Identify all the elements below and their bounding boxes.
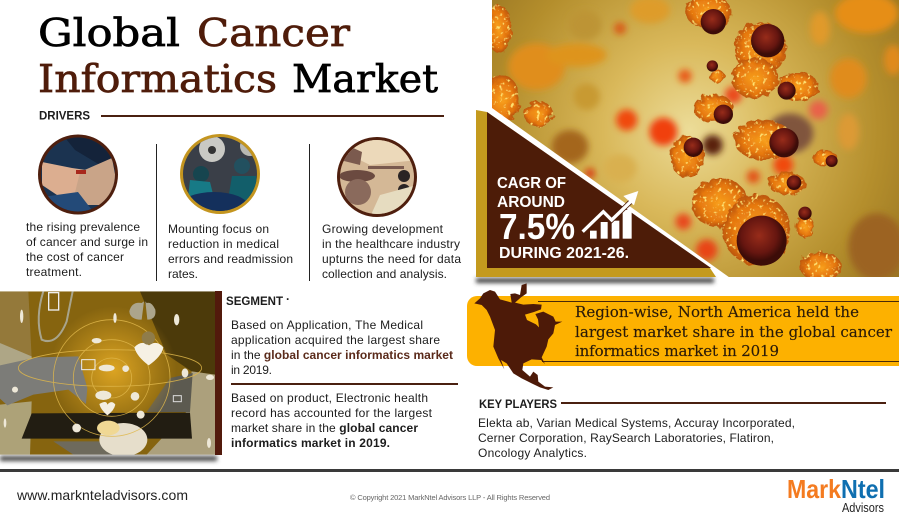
CAGR text: CAGR OF — [497, 175, 566, 192]
icon: operating room photo — [180, 134, 260, 220]
icon: surgery photo — [38, 134, 118, 214]
segment: product text: record has accounted for the largest — [231, 406, 433, 420]
key players heading: KEY PLAYERS — [479, 397, 557, 411]
banner text: largest market share in the global cancer — [575, 323, 893, 341]
footer copyright: © Copyright 2021 MarkNtel Advisors LLP - All Rights Reserved — [350, 493, 550, 502]
banner text: Region-wise, North America held the — [575, 303, 859, 321]
segment: application text — [231, 318, 453, 377]
driver 3: healthcare industry — [322, 137, 461, 281]
logo: Mark — [787, 474, 841, 504]
driver 1 text: treatment. — [26, 265, 82, 279]
driver 2 text — [168, 222, 293, 281]
icon: North America map — [474, 283, 562, 390]
logo: Advisors — [842, 501, 884, 515]
title: Market — [292, 57, 438, 101]
driver 2 text: reduction in medical — [168, 237, 279, 251]
drivers heading: DRIVERS — [39, 108, 90, 122]
segment: application text: in the global cancer informatics market — [231, 348, 453, 362]
CAGR text: AROUND — [497, 194, 565, 211]
key players list: Oncology Analytics. — [478, 446, 587, 460]
segment photo — [0, 291, 222, 461]
driver 3 text: Growing development — [322, 222, 444, 236]
driver 1 text — [26, 220, 148, 279]
segment: application text: in 2019. — [231, 363, 272, 377]
title: Global — [38, 11, 180, 55]
title: Cancer — [197, 11, 351, 55]
segment: application text: application acquired the largest share — [231, 333, 440, 347]
driver 1 text: the rising prevalence — [26, 220, 140, 234]
segment heading: SEGMENT — [226, 294, 284, 308]
CAGR text: DURING 2021-26. — [499, 245, 629, 262]
banner text — [575, 303, 893, 360]
driver 1: rising prevalence — [26, 134, 148, 279]
segment: product text: market share in the global cancer — [231, 421, 418, 435]
segment heading: · — [286, 292, 290, 306]
title — [38, 11, 438, 101]
CAGR callout — [470, 100, 740, 285]
logo — [787, 474, 885, 515]
icon: stethoscope photo — [337, 137, 417, 217]
segment: product text: Based on product, Electronic health — [231, 391, 428, 405]
key players list: Elekta ab, Varian Medical Systems, Accuray Incorporated, — [478, 416, 795, 430]
region banner — [467, 283, 899, 390]
driver 2 text: rates. — [168, 267, 198, 281]
footer website: www.marknteladvisors.com — [16, 487, 188, 503]
driver 3 text — [322, 222, 461, 281]
logo: Ntel — [841, 474, 885, 504]
driver 2: reduction in errors — [168, 134, 293, 281]
driver 3 text: upturns the need for data — [322, 252, 461, 266]
driver 1 text: of cancer and surge in — [26, 235, 148, 249]
driver 1 text: the cost of cancer — [26, 250, 124, 264]
segment: application text: Based on Application, The Medical — [231, 318, 423, 332]
CAGR text: 7.5% — [499, 206, 575, 247]
driver 3 text: collection and analysis. — [322, 267, 447, 281]
driver 2 text: errors and readmission — [168, 252, 293, 266]
CAGR text — [497, 175, 629, 262]
title: Informatics — [38, 57, 277, 101]
banner text: informatics market in 2019 — [575, 342, 779, 360]
driver 2 text: Mounting focus on — [168, 222, 269, 236]
segment: product text: informatics market in 2019. — [231, 436, 390, 450]
driver 3 text: in the healthcare industry — [322, 237, 460, 251]
key players list — [478, 416, 795, 460]
key players list: Cerner Corporation, RaySearch Laboratories, Flatiron, — [478, 431, 774, 445]
segment: product text — [231, 391, 433, 450]
icon: growth chart arrow — [583, 191, 638, 239]
cancer cell photo — [483, 0, 899, 281]
